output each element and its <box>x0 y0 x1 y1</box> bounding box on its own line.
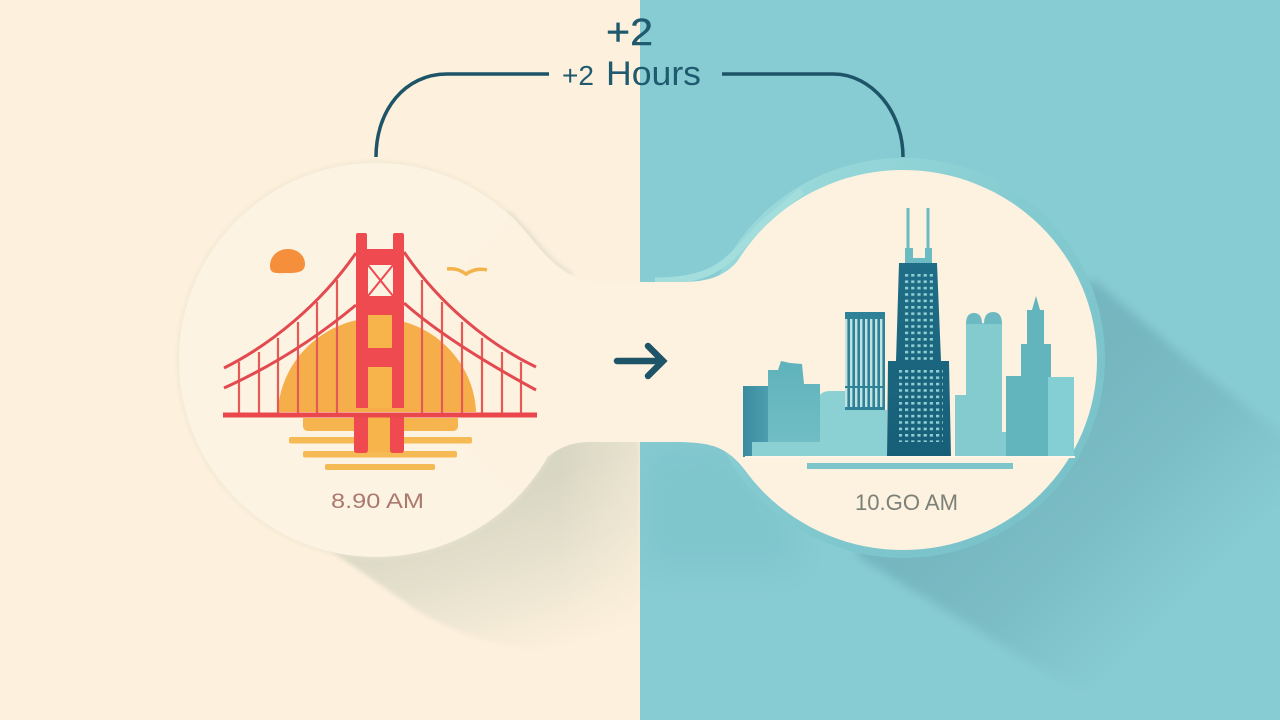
icon: arrow <box>617 346 663 376</box>
low building <box>820 391 887 457</box>
bridge deck <box>223 412 537 418</box>
label: left time: 8.90 AM <box>331 490 424 513</box>
Hancock antennas <box>905 208 932 263</box>
domes <box>966 312 1002 324</box>
far right tower <box>1006 296 1051 457</box>
striped tower <box>845 312 885 410</box>
ground bar <box>807 463 1013 469</box>
background: left cream half <box>0 0 640 720</box>
heading: +2 Hours <box>562 55 701 93</box>
background: right teal half <box>640 0 1280 720</box>
heading: +2 Hours: Hours <box>606 55 701 93</box>
Hancock windows <box>905 274 933 360</box>
connector: right bracket line <box>722 74 903 157</box>
heading: +2 Hours: +2 <box>562 60 594 91</box>
tower <box>356 233 404 408</box>
hangers <box>239 280 521 415</box>
left circle face <box>179 163 573 557</box>
highlight: neck edge <box>655 191 802 281</box>
cables <box>224 252 536 390</box>
Hancock tower <box>887 263 951 457</box>
label: right time: 10.GO AM <box>855 490 958 515</box>
large setting sun <box>278 318 476 412</box>
ring: right circle teal rim <box>701 158 1105 558</box>
shadow: left circle <box>334 442 640 635</box>
tower cross brace <box>368 265 393 296</box>
connector: left bracket line <box>376 74 549 157</box>
capsule neck <box>376 212 903 518</box>
low base <box>752 442 822 457</box>
shadow: right circle <box>640 279 1280 720</box>
right tall building <box>955 323 1006 457</box>
left dark block <box>743 386 769 457</box>
far right building <box>1048 377 1074 457</box>
icon: Golden Gate bridge with sun <box>223 233 537 470</box>
right circle face <box>709 170 1097 550</box>
tower window fill <box>368 315 392 348</box>
panel: dumbbell time-zone capsule <box>179 163 1097 557</box>
small orange sun <box>270 249 305 273</box>
neck rim shadow <box>508 212 572 274</box>
left mid building <box>768 361 820 457</box>
icon: Chicago skyline <box>743 208 1075 469</box>
heading: +2: +2 <box>606 12 653 54</box>
tower base <box>368 417 390 452</box>
horizon line <box>745 456 1075 458</box>
left circle rim <box>179 163 573 557</box>
bird <box>447 269 487 274</box>
sun reflection <box>303 418 458 431</box>
